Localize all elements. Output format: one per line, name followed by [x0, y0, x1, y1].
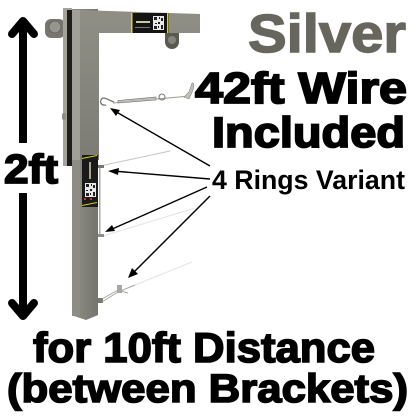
caption line 2: (between Brackets) — [7, 367, 408, 411]
bottom ring and wire clamp — [98, 262, 192, 303]
heading: Included: Included — [212, 109, 405, 157]
hanging knob — [165, 33, 179, 49]
arm sticker — [131, 13, 169, 33]
heading: 42ft Wire: 42ft Wire — [195, 64, 407, 113]
rear plate — [63, 8, 72, 166]
label: 2ft: 2ft — [4, 146, 58, 192]
double arrow: height — [12, 21, 34, 316]
middle rings and wires — [98, 151, 195, 237]
wall bolt plate — [45, 19, 65, 38]
upper arrow — [12, 21, 34, 143]
arrow to top ring — [110, 108, 210, 166]
bracket product illustration — [45, 8, 200, 320]
arrow to bottom ring — [128, 196, 210, 278]
caption line 1: for 10ft Distance — [33, 324, 375, 371]
post sticker — [82, 155, 98, 207]
label: 4 Rings Variant: 4 Rings Variant — [212, 165, 405, 195]
horizontal arm — [80, 10, 200, 160]
lower arrow — [12, 193, 34, 316]
arrow to second ring — [108, 168, 210, 179]
vertical post — [72, 9, 98, 320]
wire and turnbuckle — [101, 83, 194, 105]
heading: Silver: Silver — [248, 4, 406, 64]
pointer arrows — [105, 108, 210, 278]
arrow to third ring — [105, 187, 207, 232]
